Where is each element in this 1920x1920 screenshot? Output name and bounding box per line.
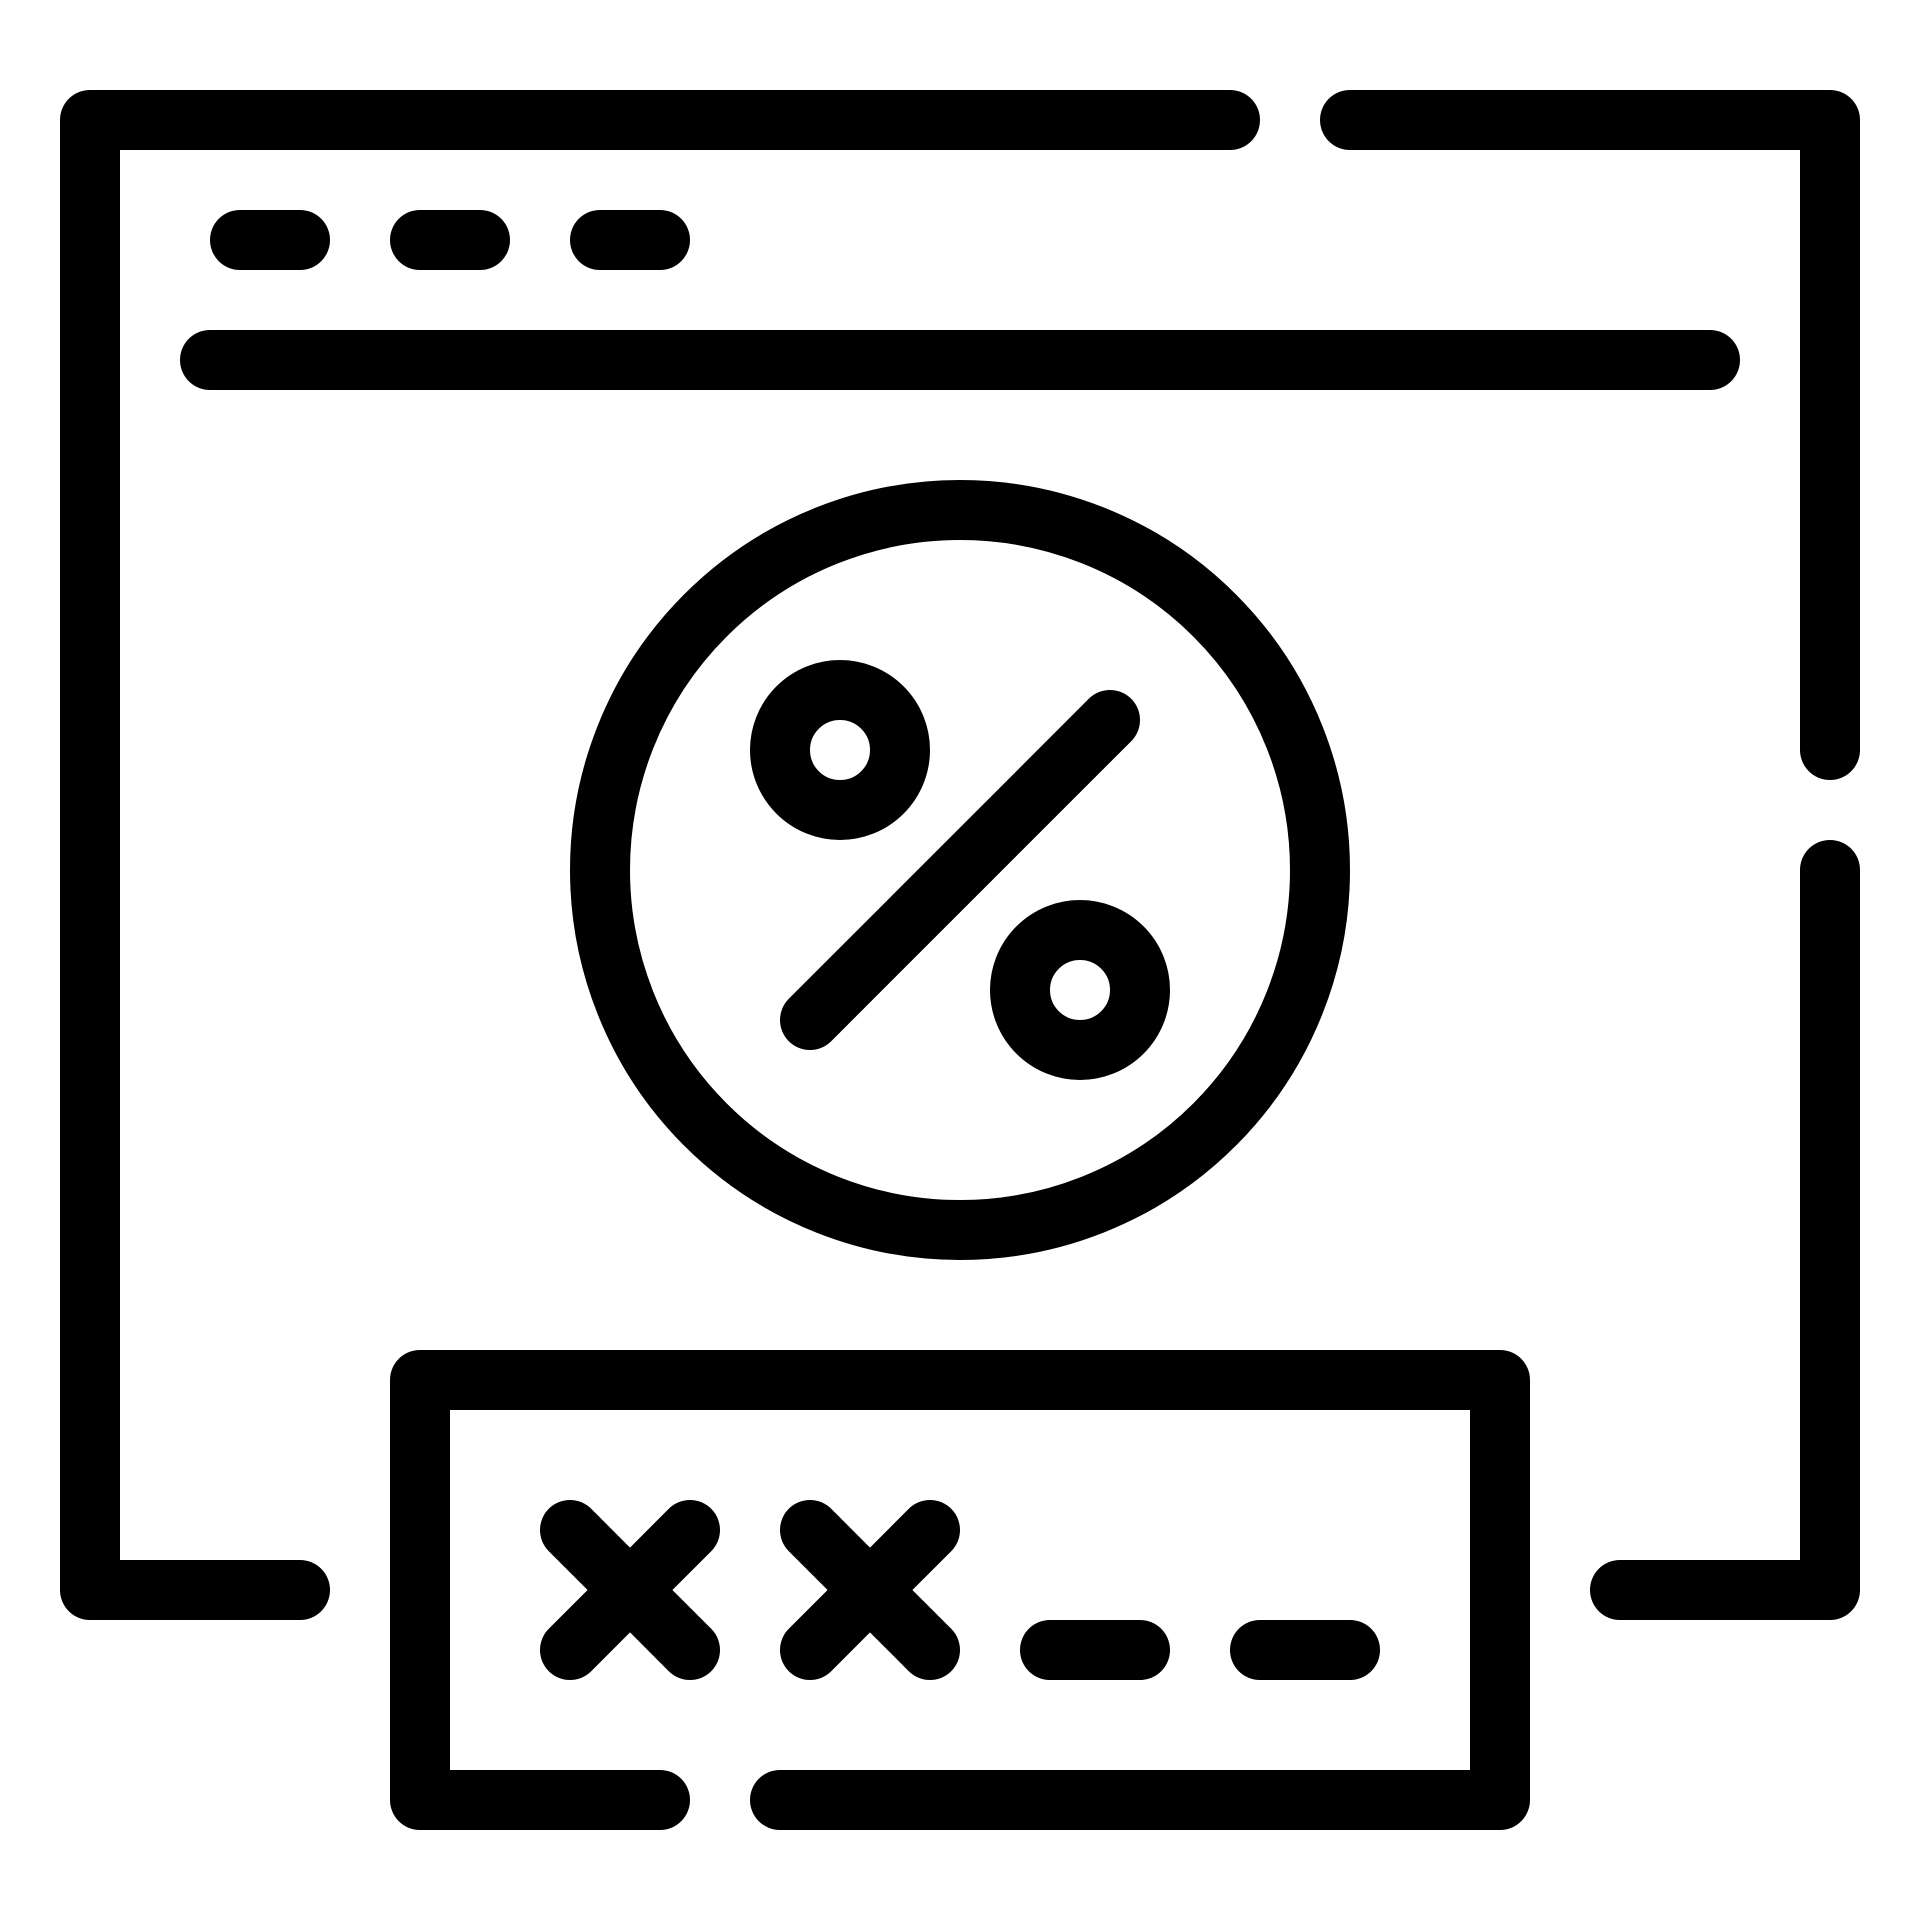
panel: coupon code box — [420, 1380, 1500, 1800]
second blank code dash — [1260, 1620, 1350, 1680]
first blank code dash — [1050, 1620, 1140, 1680]
browser toolbar buttons — [240, 210, 660, 270]
icon: first masked character — [570, 1530, 690, 1650]
panel: browser window frame — [90, 120, 1830, 1590]
icon: second masked character — [810, 1530, 930, 1650]
icon: percent badge — [600, 510, 1320, 1230]
browser address bar line — [210, 330, 1710, 390]
